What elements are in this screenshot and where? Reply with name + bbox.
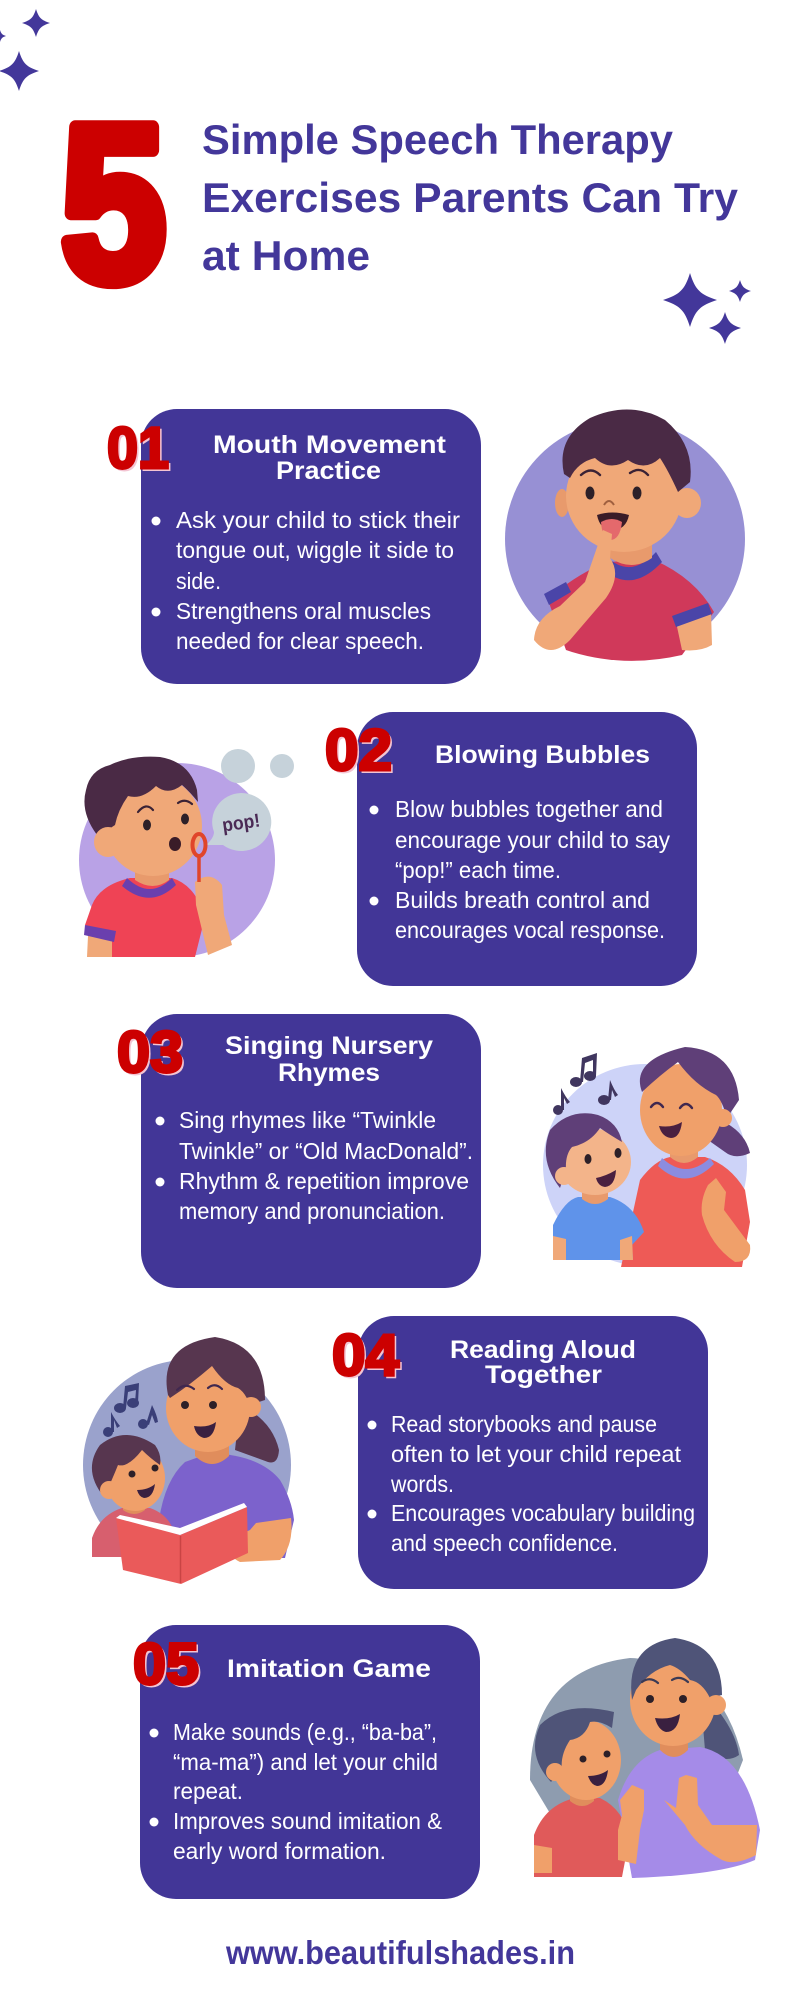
bullet list [152, 507, 460, 654]
heading: imitation game: Imitation Game [227, 1655, 431, 1683]
bullet list: tongue out, wiggle it side to [176, 537, 454, 563]
bullet list: side. [176, 568, 221, 594]
heading: singing nursery rhymes: Singing Nursery [225, 1032, 433, 1060]
bullet list: Sing rhymes like “Twinkle [179, 1107, 436, 1133]
bullet list: encourages vocal response. [395, 917, 665, 943]
step number 05: 05 [135, 1634, 201, 1699]
heading: singing nursery rhymes: Rhymes [278, 1059, 380, 1087]
panel: step 2 blowing bubbles [325, 712, 697, 986]
illustration: boy blowing bubbles [79, 749, 294, 957]
step number 02: 02 [325, 718, 392, 783]
heading: mouth movement practice [213, 431, 447, 485]
heading: singing nursery rhymes [225, 1032, 433, 1087]
bullet list: Read storybooks and pause [391, 1411, 657, 1437]
panel: step 4 reading aloud together [332, 1316, 708, 1589]
title: Simple Speech Therapy [202, 116, 674, 163]
step number 04: 04 [334, 1325, 401, 1390]
bullet list: early word formation. [173, 1838, 386, 1864]
bullet list: “pop!” each time. [395, 857, 561, 883]
illustration: mother and child imitating [530, 1638, 760, 1878]
title: Exercises Parents Can Try [202, 174, 739, 221]
footer website: www.beautifulshades.in [225, 1934, 575, 1971]
heading: reading aloud together [450, 1336, 636, 1389]
bullet list [150, 1719, 442, 1864]
bullet list: encourage your child to say [395, 827, 670, 853]
illustration: mother and child singing [543, 1047, 750, 1267]
bullet list: Blow bubbles together and [395, 796, 663, 822]
bullet list: “ma-ma”) and let your child [173, 1749, 438, 1775]
step number 01: 01 [109, 418, 171, 483]
bullet list [368, 1411, 695, 1556]
illustration: mother reading a book with child [83, 1337, 294, 1584]
bullet list: often to let your child repeat [391, 1441, 682, 1467]
bullet list: needed for clear speech. [176, 628, 424, 654]
heading: blowing bubbles: Blowing Bubbles [435, 741, 650, 769]
step number 02: 02 [327, 720, 394, 785]
bullet list [370, 796, 670, 943]
bullet list: Twinkle” or “Old MacDonald”. [179, 1138, 473, 1164]
panel: step 3 singing nursery rhymes [117, 1014, 481, 1288]
bullet list: Rhythm & repetition improve [179, 1168, 469, 1194]
step number 03: 03 [119, 1022, 185, 1087]
heading: mouth movement practice: Practice [276, 457, 381, 485]
panel: step 1 mouth movement practice [107, 409, 481, 684]
bullet list: repeat. [173, 1778, 243, 1804]
heading: reading aloud together: Together [485, 1361, 602, 1389]
bullet list: Strengthens oral muscles [176, 598, 431, 624]
bullet list: Make sounds (e.g., “ba-ba”, [173, 1719, 437, 1745]
step number 04: 04 [332, 1323, 399, 1388]
illustration: boy sticking tongue out [505, 409, 745, 661]
bullet list: Improves sound imitation & [173, 1808, 442, 1834]
title: big number five: 5 [61, 80, 166, 328]
bullet list: and speech confidence. [391, 1530, 618, 1556]
bullet list: Ask your child to stick their [176, 507, 460, 533]
bullet list [156, 1107, 473, 1224]
icon: sparkles top right [663, 273, 751, 344]
bullet list: words. [390, 1471, 454, 1497]
bullet list: Encourages vocabulary building [391, 1500, 695, 1526]
panel: step 5 imitation game [133, 1625, 480, 1899]
title [202, 116, 739, 279]
speech bubble word: pop: pop! [221, 810, 261, 837]
heading: reading aloud together: Reading Aloud [450, 1336, 636, 1364]
heading: mouth movement practice: Mouth Movement [213, 431, 447, 459]
bullet list: memory and pronunciation. [179, 1198, 445, 1224]
icon: sparkles top left [0, 9, 50, 91]
bullet list: Builds breath control and [395, 887, 650, 913]
step number 03: 03 [117, 1020, 183, 1085]
step number 05: 05 [133, 1632, 199, 1697]
step number 01: 01 [107, 416, 169, 481]
title: at Home [202, 232, 370, 279]
